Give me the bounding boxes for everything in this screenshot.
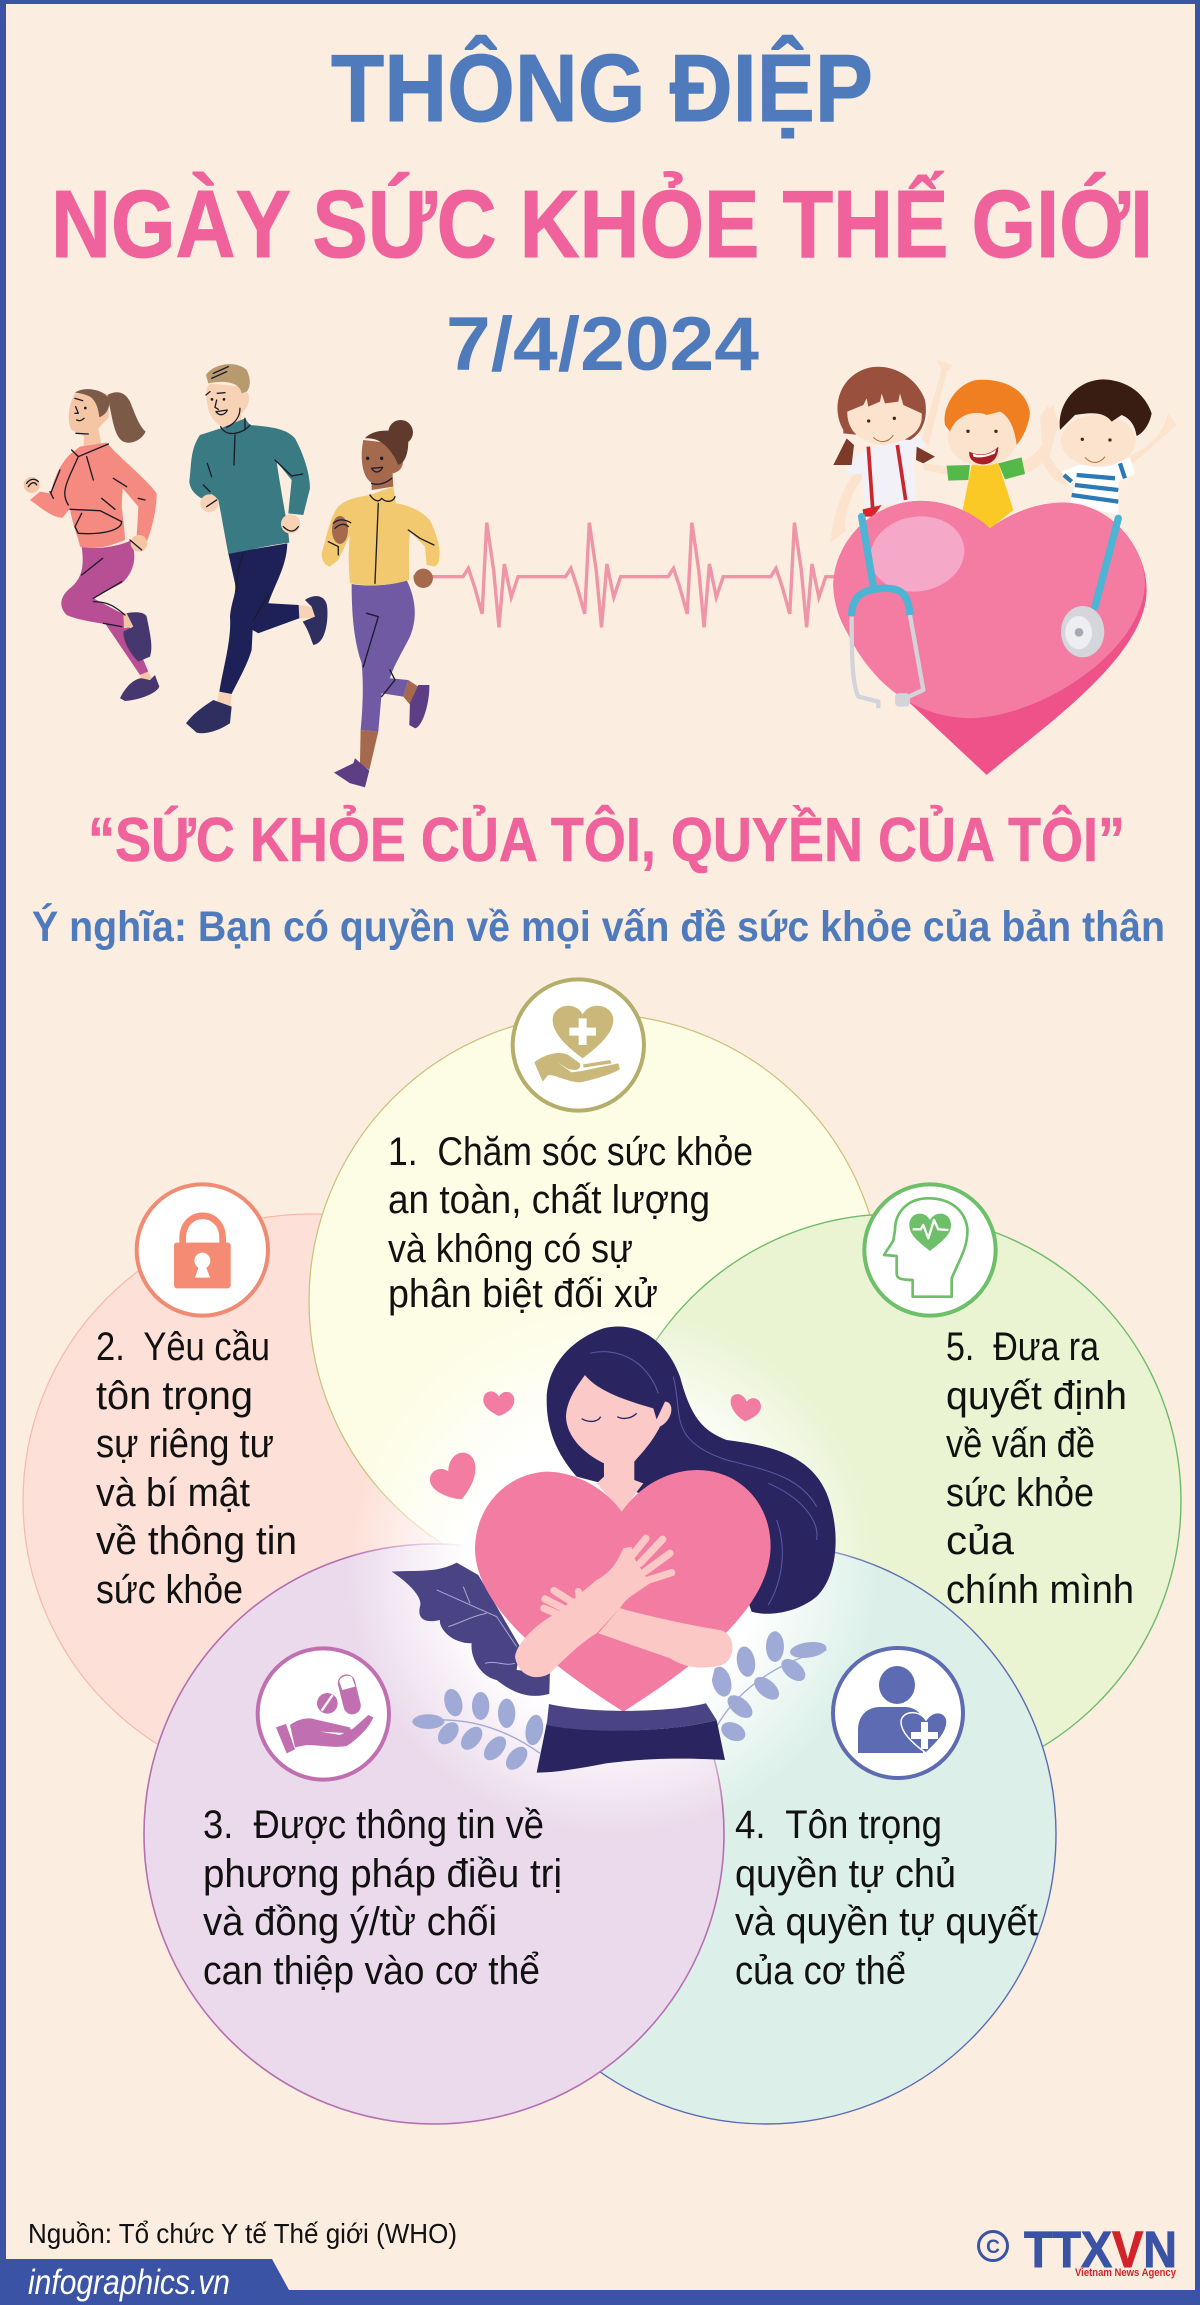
text block: right 5: của [946, 1519, 1015, 1563]
text block: right 2: tôn trọng [96, 1374, 253, 1418]
text block: right 1: 1. Chăm sóc sức khỏe [388, 1130, 753, 1174]
text block: right 5 [946, 1325, 1134, 1612]
text block: right 2: về thông tin [96, 1519, 297, 1563]
orange hair boy [923, 463, 948, 475]
text block: right 2: sức khỏe [96, 1568, 243, 1612]
footer band with website [0, 2259, 1200, 2305]
text block: right 3: can thiệp vào cơ thể [203, 1949, 540, 1993]
pink heart [475, 1470, 771, 1712]
icon: caring hand with heart [513, 979, 644, 1111]
text block: right 4 [735, 1803, 1038, 1993]
text block: right 5: quyết định [946, 1374, 1127, 1418]
text block: right 3: phương pháp điều trị [203, 1852, 562, 1896]
illustration: three children behind heart [830, 360, 1177, 543]
panel: right 4 circle background [476, 1544, 1056, 2124]
text block: right 3: 3. Được thông tin về [203, 1803, 544, 1847]
panel: right 3 circle background [144, 1544, 724, 2124]
face and neck [566, 1375, 671, 1512]
skirt [537, 1720, 725, 1773]
illustration: big pink heart with stethoscope [833, 501, 1147, 775]
logo: TTXVN: C [986, 2237, 1000, 2258]
hair [547, 1326, 836, 1614]
icon: hand with pills [258, 1648, 389, 1780]
illustration: woman hugging heart [392, 1326, 836, 1774]
source: Nguồn: Tổ chức Y tế Thế giới (WHO) [28, 2218, 457, 2249]
date: 7/4/2024 [446, 302, 759, 387]
text block: right 3 [203, 1803, 562, 1993]
illustration: runner in teal top [186, 364, 327, 733]
text block: right 1: phân biệt đối xử [388, 1272, 658, 1316]
title: Thông điệp: THÔNG ĐIỆP [331, 34, 873, 142]
text block: right 1 [388, 1130, 753, 1316]
panel: right 5 circle background [607, 1214, 1181, 1788]
text block: right 5: 5. Đưa ra [946, 1325, 1100, 1369]
girl [830, 465, 863, 543]
text block: right 2: 2. Yêu cầu [96, 1325, 270, 1369]
text block: right 3: và đồng ý/từ chối [203, 1900, 497, 1944]
text block: right 5: chính mình [946, 1568, 1134, 1612]
text block: right 2 [96, 1325, 297, 1612]
dark hair boy [1040, 405, 1067, 485]
illustration: heartbeat line [413, 523, 838, 627]
text block: right 5: sức khỏe [946, 1471, 1094, 1515]
text block: right 1: an toàn, chất lượng [388, 1178, 710, 1222]
small hearts [483, 1391, 514, 1416]
arms [598, 1608, 732, 1668]
text block: right 4: của cơ thể [735, 1949, 906, 1993]
left branch [412, 1687, 546, 1774]
illustration: runner in pink hoodie [24, 389, 159, 701]
footer band with website: infographics.vn [28, 2263, 230, 2302]
panel: right 1 circle background [309, 1014, 883, 1588]
text block: right 5: về vấn đề [946, 1422, 1095, 1466]
text block: right 4: quyền tự chủ [735, 1852, 956, 1896]
icon: person with heart [833, 1648, 963, 1778]
text block: right 1: và không có sự [388, 1227, 633, 1271]
text block: right 2: sự riêng tư [96, 1422, 274, 1466]
icon: head with heart pulse [864, 1184, 996, 1316]
logo: TTXVN: Vietnam News Agency [1075, 2267, 1177, 2279]
logo: TTXVN: TTXVN [1024, 2221, 1177, 2278]
icon: padlock [137, 1184, 268, 1316]
dark leaf [392, 1563, 552, 1696]
text block: right 4: 4. Tôn trọng [735, 1803, 942, 1847]
illustration: runner in yellow jacket [322, 420, 440, 787]
text block: right 4: và quyền tự quyết [735, 1900, 1038, 1944]
white shirt [549, 1660, 717, 1705]
right branch [709, 1631, 828, 1745]
panel: right 2 circle background [23, 1214, 597, 1788]
text block: right 2: và bí mật [96, 1471, 250, 1515]
